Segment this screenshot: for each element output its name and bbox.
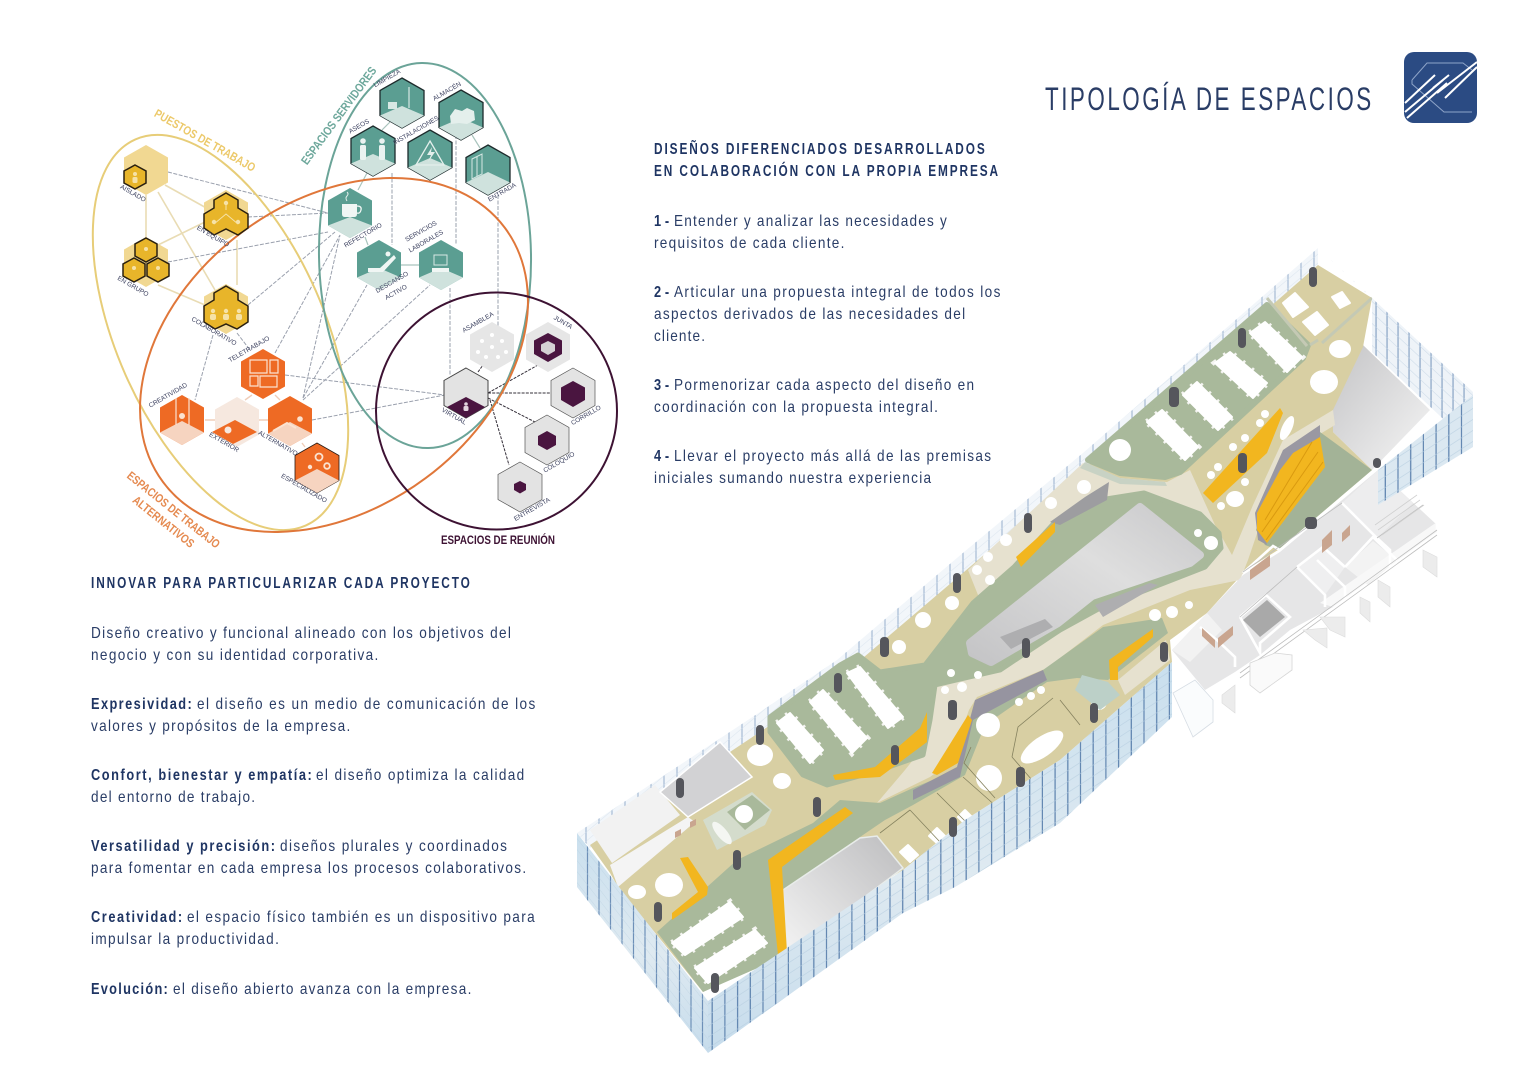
- purple wall: [913, 670, 1047, 800]
- upper workspace green: [1088, 305, 1308, 477]
- hex: aseos: ASEOS: [348, 118, 371, 135]
- lower void: [783, 836, 903, 955]
- hex: colaborativo: COLABORATIVO: [190, 316, 238, 347]
- hex: instalaciones: [392, 114, 452, 180]
- text block: innovar principles: el espacio físico también es un dispositivo para: [187, 909, 535, 926]
- title: TIPOLOGÍA DE ESPACIOS: [1045, 81, 1371, 117]
- heading: diseños diferenciados: [654, 138, 998, 179]
- inner glass wall: [1378, 395, 1473, 505]
- hex: alternativo: ALTERNATIVO: [257, 430, 299, 458]
- hex: refectorio: REFECTORIO: [343, 222, 383, 249]
- text block: innovar principles: del entorno de trabajo.: [91, 789, 255, 806]
- text block: numbered steps: [654, 213, 1000, 487]
- left glass wall: [577, 833, 708, 1053]
- meeting room partitions: [880, 698, 1080, 842]
- logo: [1404, 52, 1477, 123]
- ellipse: espacios servidores: [316, 61, 534, 450]
- heading: espacios servidores: ESPACIOS SERVIDORES: [298, 64, 379, 167]
- ellipse: espacios de trabajo alternativos: [71, 105, 597, 605]
- light paths: [877, 410, 1335, 803]
- hex: aislado: AISLADO: [119, 184, 147, 204]
- hex: refectorio: [328, 188, 383, 249]
- text block: innovar principles: para fomentar en cada empresa los procesos colaborativos.: [91, 860, 526, 877]
- auditorium rim: [1255, 425, 1320, 545]
- atrium void: [970, 507, 1200, 662]
- text block: numbered steps: requisitos de cada cliente.: [654, 235, 844, 252]
- circle: espacios de reunión: [376, 292, 617, 530]
- hex: servicios laborales: LABORALES: [408, 229, 445, 254]
- hex: coloquio: COLOQUIO: [542, 451, 576, 474]
- hex: exterior: [208, 397, 259, 454]
- hex: servicios laborales: [404, 220, 463, 290]
- hex: colaborativo: [190, 284, 248, 347]
- right void: [1333, 345, 1430, 470]
- hex: entrevista: [498, 462, 552, 523]
- hex: aseos: [348, 118, 395, 176]
- text block: innovar principles: negocio y con su identidad corporativa.: [91, 647, 378, 664]
- entry box: [1173, 680, 1213, 737]
- hex: entrada: ENTRADA: [487, 182, 518, 203]
- text block: innovar principles: el diseño abierto avanza con la empresa.: [173, 981, 471, 998]
- workstation chairs: [672, 322, 1302, 983]
- text block: numbered steps: aspectos derivados de las necesidades del: [654, 306, 965, 323]
- atrium ramps: [1000, 583, 1158, 649]
- text block: innovar principles: Expresividad:: [91, 696, 192, 713]
- hex: teletrabajo: [227, 335, 285, 399]
- hex: en grupo: [116, 237, 169, 298]
- text block: numbered steps: Articular una propuesta integral de todos los: [674, 284, 1000, 301]
- text block: numbered steps: iniciales sumando nuestra experiencia: [654, 470, 932, 487]
- isometric office floor plan: [577, 248, 1473, 1053]
- right end glass wall: [1318, 248, 1473, 447]
- text block: innovar principles: Confort, bienestar y empatía:: [91, 767, 312, 784]
- hex: corrillo: [551, 368, 602, 427]
- heading: espacios de trabajo alternativos: ALTERNATIVOS: [130, 493, 197, 551]
- hex: alternativo: [257, 396, 312, 458]
- hex: descanso activo: [357, 240, 410, 302]
- text block: numbered steps: Llevar el proyecto más allá de las premisas: [674, 448, 991, 465]
- ellipse: puestos de trabajo: [40, 97, 401, 568]
- hex: en equipo: [195, 190, 248, 249]
- text block: innovar principles: [91, 625, 535, 998]
- left wall strip: [610, 817, 695, 887]
- light green rim: [1080, 462, 1167, 486]
- heading: innovar: INNOVAR PARA PARTICULARIZAR CADA PROYECTO: [91, 573, 470, 591]
- hex: limpieza: LIMPIEZA: [373, 68, 402, 89]
- yellow benches: [672, 408, 1283, 955]
- columns: [654, 267, 1381, 993]
- hex: junta: [526, 315, 574, 372]
- heading: diseños diferenciados: DISEÑOS DIFERENCIADOS DESARROLLADOS: [654, 138, 985, 157]
- text block: innovar principles: Evolución:: [91, 981, 168, 998]
- lower green band: [657, 618, 1168, 992]
- left stair room: [590, 785, 680, 863]
- hex: creatividad: CREATIVIDAD: [148, 382, 189, 410]
- left green room: [703, 792, 772, 850]
- hex: descanso activo: DESCANSO: [375, 271, 410, 295]
- front glass wall: [708, 662, 1172, 1053]
- heading: espacios de trabajo alternativos: ESPACIOS DE TRABAJO: [124, 469, 223, 551]
- text block: innovar principles: el diseño optimiza la calidad: [316, 767, 524, 784]
- heading: diseños diferenciados: EN COLABORACIÓN CON LA PROPIA EMPRESA: [654, 160, 998, 179]
- text block: numbered steps: Entender y analizar las necesidades y: [674, 213, 947, 230]
- workstations: [672, 292, 1350, 983]
- hex: asamblea: [461, 311, 514, 372]
- core box: [1250, 653, 1292, 693]
- entrance glass room: [1075, 675, 1120, 710]
- grey wedge: [1050, 482, 1109, 525]
- hex: asamblea: ASAMBLEA: [461, 311, 496, 334]
- left grey room: [660, 742, 752, 817]
- auditorium green: [1256, 432, 1372, 550]
- text block: innovar principles: Creatividad:: [91, 909, 182, 926]
- chart: space typology network diagram: [40, 61, 617, 605]
- hex: aislado: [119, 145, 168, 204]
- hex: junta: JUNTA: [552, 315, 574, 331]
- core piers: [1222, 550, 1437, 713]
- hex: exterior: EXTERIOR: [208, 431, 240, 454]
- hex: servicios laborales: SERVICIOS: [404, 220, 439, 244]
- hex: instalaciones: INSTALACIONES: [392, 114, 441, 147]
- hex: virtual: [440, 368, 488, 427]
- text block: numbered steps: 3-: [654, 377, 669, 394]
- hex: en grupo: EN GRUPO: [116, 275, 150, 298]
- hex: virtual: VIRTUAL: [440, 407, 468, 427]
- hex: corrillo: CORRILLO: [570, 404, 602, 427]
- hex: almacén: ALMACÉN: [431, 79, 463, 103]
- entrance sand strip: [1118, 640, 1170, 695]
- doors: [675, 819, 696, 838]
- text block: numbered steps: 4-: [654, 448, 669, 465]
- hex: entrevista: ENTREVISTA: [513, 496, 552, 523]
- service core: [1172, 468, 1437, 690]
- text block: innovar principles: Diseño creativo y funcional alineado con los objetivos del: [91, 625, 511, 642]
- corner partition: [1267, 298, 1372, 346]
- sand floor: [590, 265, 1372, 992]
- auditorium steps: [1257, 437, 1325, 543]
- text block: innovar principles: impulsar la productividad.: [91, 931, 279, 948]
- back glass wall: [577, 248, 1318, 848]
- text block: numbered steps: Pormenorizar cada aspecto del diseño en: [674, 377, 974, 394]
- hex: entrada: [466, 145, 518, 203]
- text block: numbered steps: cliente.: [654, 328, 705, 345]
- heading: espacios de reunión: ESPACIOS DE REUNIÓN: [441, 532, 555, 547]
- hex: descanso activo: ACTIVO: [384, 284, 408, 302]
- heading: puestos de trabajo: PUESTOS DE TRABAJO: [152, 106, 258, 175]
- hex: almacén: [431, 79, 483, 140]
- hex: limpieza: [373, 68, 424, 128]
- hex: especializado: [280, 443, 339, 505]
- hex: especializado: ESPECIALIZADO: [280, 473, 328, 505]
- hex: en equipo: EN EQUIPO: [195, 225, 230, 249]
- text block: innovar principles: diseños plurales y coordinados: [280, 838, 507, 855]
- text block: innovar principles: Versatilidad y precisión:: [91, 838, 275, 855]
- tables: [628, 340, 1351, 899]
- connector lines: [146, 122, 552, 465]
- text block: numbered steps: 2-: [654, 284, 669, 301]
- green band around atrium: [770, 493, 1221, 785]
- heading: espacios de trabajo alternativos: [124, 469, 223, 551]
- hex: creatividad: [148, 382, 204, 445]
- hex: teletrabajo: TELETRABAJO: [227, 335, 271, 364]
- text block: innovar principles: valores y propósitos de la empresa.: [91, 718, 350, 735]
- text block: innovar principles: el diseño es un medio de comunicación de los: [197, 696, 535, 713]
- hex: coloquio: [525, 415, 576, 474]
- text block: numbered steps: coordinación con la propuesta integral.: [654, 399, 938, 416]
- text block: numbered steps: 1-: [654, 213, 669, 230]
